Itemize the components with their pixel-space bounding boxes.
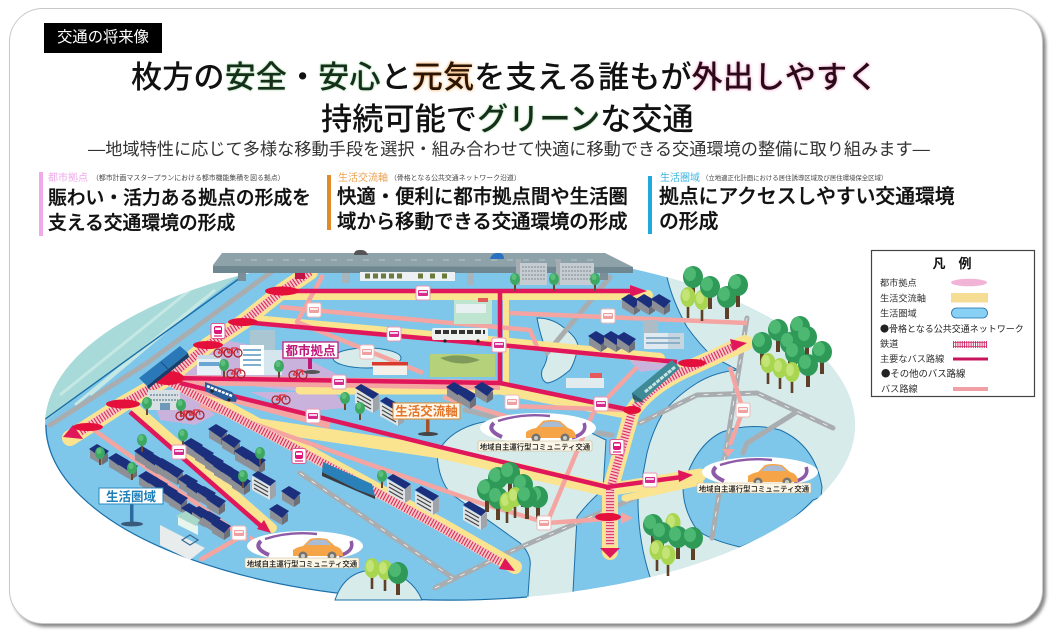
highway (213, 250, 633, 285)
legend row: urban hub (880, 277, 987, 288)
tree cluster centre (477, 462, 548, 523)
legend heading: other bus: ●その他のバス路線 (881, 366, 966, 380)
hub land purple (150, 340, 670, 425)
railway lines (80, 272, 735, 562)
sign: urban hub (283, 342, 338, 374)
text block: life zone: 生活圏域 (660, 173, 700, 184)
text block: life corridor: 快適・便利に都市拠点間や生活圏 (337, 186, 628, 208)
legend row: main bus (880, 353, 988, 364)
region: river west (45, 276, 238, 421)
text block: life corridor: 生活交流軸 (338, 173, 388, 184)
text block: life corridor: （骨格となる公共交通ネットワーク沿道） (390, 175, 521, 182)
text block: life corridor (327, 172, 628, 233)
legend row: main bus: 主要なバス路線 (880, 353, 944, 364)
community transport east (697, 457, 818, 493)
station buildings centre (430, 298, 604, 388)
legend row: life corridor (880, 292, 988, 304)
mask above highway (200, 238, 640, 253)
oval outline lower left (46, 425, 527, 600)
apartments (252, 384, 487, 530)
text block: life zone (648, 172, 955, 234)
community transport centre (478, 413, 596, 451)
text block: life zone: （立地適正化計画における居住誘導区域及び居住環境保全区域） (702, 175, 887, 182)
convenience store (372, 362, 408, 375)
tree cluster east (752, 316, 832, 393)
text block: urban hub: 支える交通環境の形成 (48, 212, 235, 233)
trees north (510, 273, 600, 291)
train south (322, 462, 375, 499)
arrowheads red (63, 285, 747, 571)
region: pond (537, 318, 578, 383)
sign: life zone: 生活圏域 (106, 489, 156, 504)
sign: life corridor: 生活交流軸 (395, 404, 458, 418)
title line 2: 持続可能でグリーンな交通 (321, 102, 694, 137)
station building west (142, 390, 186, 417)
region: green land east (638, 277, 855, 578)
small trees in town (95, 392, 387, 488)
legend: 凡 例 (932, 256, 972, 271)
region: green land south centre (438, 420, 606, 610)
sign: life zone (99, 488, 163, 526)
main bus routes (130, 291, 682, 527)
train west (139, 346, 189, 389)
legend row: life zone: 生活圏域 (880, 308, 917, 318)
section tag: 交通の将来像 (57, 29, 149, 46)
tree cluster south (335, 558, 422, 600)
road: along river (44, 262, 285, 425)
text block: urban hub (39, 172, 311, 236)
map illustration (45, 250, 1036, 601)
legend row: life corridor: 生活交流軸 (880, 292, 926, 304)
subtitle: —地域特性に応じて多様な移動手段を選択・組み合わせて快適に移動できる交通環境の整備に取り組みます— (88, 139, 930, 159)
sign: urban hub: 都市拠点 (285, 343, 336, 358)
community transport east: 地域自主運行型コミュニティ交通 (699, 484, 810, 493)
text block: urban hub: 賑わい・活力ある拠点の形成を (48, 187, 311, 208)
train east (632, 360, 680, 403)
tree cluster north east (680, 266, 748, 321)
legend row: railway: 鉄道 (880, 338, 898, 349)
arrowheads pink (249, 413, 735, 547)
bus stops (172, 286, 750, 540)
local bus centre (432, 328, 488, 343)
legend row: life zone (880, 308, 988, 318)
yellow corridors (70, 272, 745, 567)
region: blue pool east (683, 426, 822, 547)
low houses (89, 424, 301, 540)
legend (872, 250, 1034, 396)
community transport south: 地域自主運行型コミュニティ交通 (247, 559, 358, 568)
tree cluster south east (643, 513, 703, 576)
train stops (211, 324, 624, 464)
title line 1: 枚方の安全・安心と元気を支える誰もが外出しやすく (131, 60, 878, 95)
tower buildings north (516, 259, 594, 285)
community transport south (245, 531, 363, 568)
region: pond west (333, 348, 401, 368)
section tag (44, 23, 162, 53)
gray roads (300, 277, 833, 588)
bicycles (176, 348, 307, 420)
office east (643, 320, 684, 349)
legend row: bus: バス路線 (881, 383, 918, 394)
community transport centre: 地域自主運行型コミュニティ交通 (480, 442, 591, 451)
house clusters east (446, 294, 671, 409)
text block: life zone: 拠点にアクセスしやすい交通環境 (659, 186, 955, 208)
legend heading: backbone network: ●骨格となる公共交通ネットワーク (880, 322, 1024, 335)
text block: life corridor: 域から移動できる交通環境の形成 (337, 211, 627, 233)
text block: urban hub: （都市計画マスタープランにおける都市機能集積を図る拠点） (92, 175, 285, 182)
legend row: railway (880, 338, 987, 349)
text block: life zone: の形成 (659, 211, 718, 233)
ground: city oval (45, 269, 855, 600)
bus west (205, 382, 237, 402)
text block: urban hub: 都市拠点 (48, 173, 88, 184)
legend row: urban hub: 都市拠点 (880, 277, 917, 288)
sign: life corridor (393, 403, 460, 436)
hub ellipses (73, 286, 706, 521)
city buildings hub (197, 330, 284, 378)
legend row: bus (881, 383, 988, 394)
pink bus roads (90, 275, 747, 560)
small parking building (160, 511, 205, 560)
